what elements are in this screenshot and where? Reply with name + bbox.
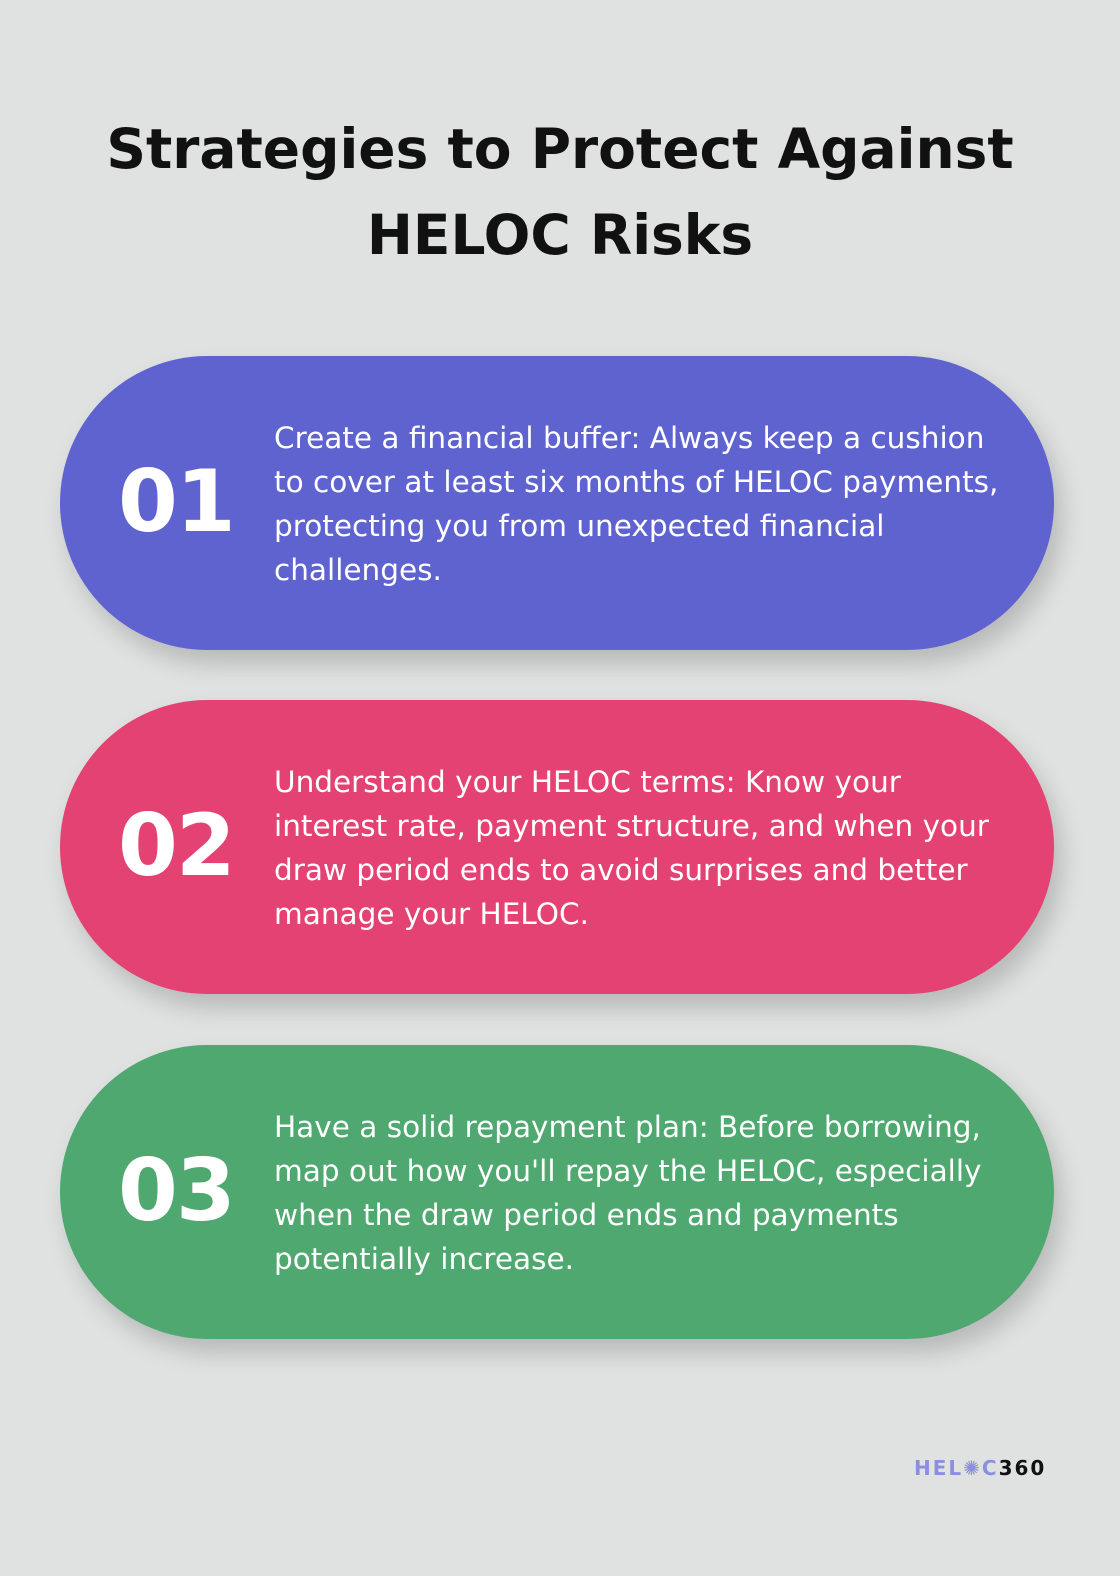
number 03: 03 — [118, 1141, 234, 1241]
title — [106, 117, 1014, 267]
text 03: Have a solid repayment plan: Before borrowing, map out how you'll repay the HELOC, especially when the draw period ends and payments potentially increase. — [274, 1110, 982, 1276]
number 02: 02 — [118, 796, 234, 896]
title: Strategies to Protect Against — [106, 117, 1014, 181]
number 01: 01 — [118, 452, 234, 552]
panel: strategy 02 — [60, 700, 1054, 994]
logo: HEL✺C360 — [914, 1456, 1046, 1480]
panel: strategy 01 — [60, 356, 1054, 650]
text 02: Understand your HELOC terms: Know your interest rate, payment structure, and when your draw period ends to avoid surprises and better manage your HELOC. — [274, 765, 989, 931]
title: HELOC Risks — [367, 203, 753, 267]
text 01: Create a financial buffer: Always keep a cushion to cover at least six months of HELOC payments, protecting you from unexpected financial challenges. — [274, 421, 998, 587]
panel: strategy 03 — [60, 1045, 1054, 1339]
